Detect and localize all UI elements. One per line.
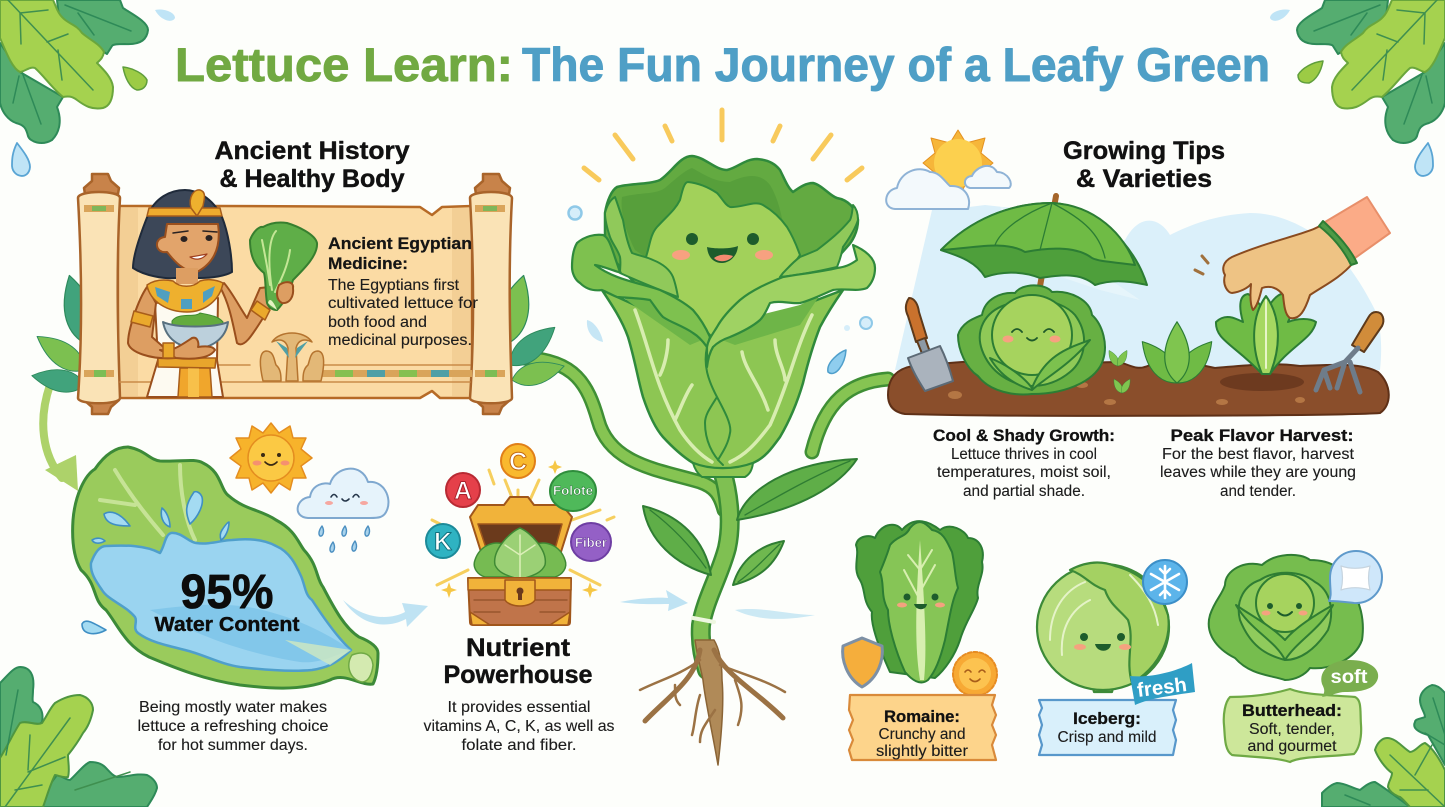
text: cool and shady growth: Lettuce thrives in cool (951, 446, 1097, 463)
corner leaves: bottom left (0, 667, 157, 807)
lettuce leaf (73, 447, 378, 688)
corner leaves: top right (1297, 0, 1445, 143)
raised arm (220, 283, 279, 344)
butterhead card: and gourmet (1248, 738, 1337, 755)
scroll band decoration (84, 205, 505, 382)
seed flecks (1195, 256, 1208, 274)
hair and headdress (133, 190, 232, 278)
lower arm (128, 287, 176, 358)
romaine card (849, 695, 996, 760)
shield icon (843, 638, 882, 687)
arrow: nutrients to plant (620, 590, 815, 619)
nutrient description: It provides essential (448, 699, 590, 716)
soil mound (888, 360, 1389, 416)
lettuce head centre twist (705, 347, 730, 465)
nutrient description: folate and fiber. (462, 737, 576, 754)
water description: lettuce a refreshing choice (138, 718, 329, 735)
butterhead head (1209, 555, 1363, 680)
water droplets (82, 492, 229, 634)
fresh ribbon: fresh (1136, 674, 1188, 702)
egyptian woman holding lettuce (128, 190, 317, 397)
text: cool and shady growth (933, 427, 1115, 500)
stem leaves (643, 459, 857, 585)
nutrient description (424, 699, 614, 754)
water description: for hot summer days. (158, 737, 308, 754)
picked lettuce (1216, 294, 1316, 374)
vitamin badges: C (509, 448, 527, 476)
text: cool and shady growth: temperatures, moist soil, (937, 464, 1111, 481)
stem (701, 470, 730, 670)
section heading: growing tips: Growing Tips (1063, 137, 1225, 165)
arrow: scroll to water leaf (43, 385, 78, 491)
variety: butterhead (1209, 551, 1382, 762)
nutrient heading: Powerhouse (444, 661, 593, 689)
text: peak flavor harvest: For the best flavor, harvest (1162, 446, 1355, 463)
panel: egyptian scroll (30, 174, 567, 414)
egyptian medicine text: Ancient Egyptian (328, 235, 472, 253)
text: peak flavor harvest: leaves while they are young (1160, 464, 1356, 481)
nutrient heading (444, 634, 593, 689)
seedlings (1106, 322, 1220, 395)
nutrient heading: Nutrient (466, 634, 571, 662)
treasure chest lid (470, 497, 572, 555)
egyptian medicine text: The Egyptians first (328, 277, 460, 294)
title: The Fun Journey of a Leafy Green (522, 38, 1270, 91)
vitamin badges: K (434, 528, 452, 556)
egyptian medicine text: Medicine: (328, 255, 408, 273)
pillow bubble (1329, 551, 1382, 603)
text: cool and shady growth: and partial shade. (963, 483, 1085, 500)
egyptian medicine text: medicinal purposes. (328, 332, 472, 349)
iceberg card: Crisp and mild (1058, 729, 1156, 746)
panel: nutrient powerhouse (424, 444, 614, 754)
hand fork (1316, 312, 1383, 392)
soft bubble: soft (1330, 667, 1368, 688)
decorative water drops and small leaves (12, 9, 1433, 176)
central lettuce plant (568, 110, 875, 765)
corner leaves: top left (0, 0, 148, 143)
panel: water content (73, 423, 388, 754)
sky backdrop (895, 205, 1381, 370)
held lettuce (250, 222, 317, 310)
sun and clouds (886, 130, 1011, 209)
water description: Being mostly water makes (139, 699, 327, 716)
garden trowel (906, 298, 953, 391)
panel: garden scene (886, 130, 1390, 416)
bowl of greens (172, 313, 223, 327)
parchment (118, 206, 472, 398)
iceberg head (1037, 563, 1169, 692)
vitamin badges: Folote (553, 484, 593, 498)
connector vines (525, 358, 888, 510)
dress (147, 298, 223, 397)
water description (138, 699, 329, 754)
section heading: ancient history: & Healthy Body (220, 165, 405, 193)
romaine card: Crunchy and (878, 726, 966, 743)
sparkles (441, 460, 598, 598)
section heading: ancient history: Ancient History (214, 137, 410, 165)
leaf umbrella (941, 196, 1147, 292)
scroll side leaves (30, 272, 567, 396)
iceberg card: Iceberg: (1073, 710, 1141, 728)
butterhead card: Butterhead: (1242, 702, 1342, 720)
vitamin badges: A (454, 477, 472, 505)
scroll rollers (78, 174, 512, 414)
rain cloud icon (298, 469, 388, 552)
water content label: Water Content (154, 614, 300, 636)
butterhead card: Soft, tender, (1249, 721, 1335, 738)
plant water drops (568, 206, 872, 373)
text: peak flavor harvest: Peak Flavor Harvest: (1170, 427, 1354, 445)
text: cool and shady growth: Cool & Shady Growth: (933, 427, 1115, 445)
water pool (91, 533, 351, 671)
romaine leaves (856, 521, 983, 682)
arrow: water to nutrients (343, 600, 428, 627)
variety: iceberg (1037, 560, 1195, 755)
fresh ribbon (1130, 663, 1195, 705)
lettuce head upright leaves (605, 197, 678, 297)
variety: romaine (843, 521, 997, 760)
title: Lettuce Learn: (175, 38, 513, 91)
smiling sun badge (953, 652, 997, 696)
egyptian medicine text (328, 235, 478, 349)
romaine card: Romaine: (884, 708, 960, 726)
lettuce head cup (602, 290, 843, 468)
section heading: growing tips (1063, 137, 1225, 193)
lettuce head back leaves (605, 156, 858, 300)
vitamin badges: Fiber (575, 536, 607, 550)
collar (147, 280, 223, 312)
snowflake badge (1143, 560, 1187, 604)
corner leaves: bottom right (1322, 685, 1445, 807)
text: peak flavor harvest (1160, 427, 1356, 500)
nutrient description: vitamins A, C, K, as well as (424, 718, 614, 735)
lettuce in chest (474, 528, 566, 578)
treasure chest base (468, 578, 571, 625)
egyptian medicine text: both food and (328, 314, 427, 331)
romaine card: slightly bitter (876, 743, 968, 760)
sun icon (230, 423, 312, 493)
lettuce under umbrella (958, 285, 1105, 394)
sparkle rays (432, 470, 614, 585)
section heading: ancient history (214, 137, 410, 193)
gloved hand (1223, 197, 1390, 318)
iceberg card (1039, 700, 1176, 755)
lotus ornament (260, 333, 324, 381)
section heading: growing tips: & Varieties (1076, 165, 1212, 193)
lettuce head face (646, 182, 800, 337)
text: peak flavor harvest: and tender. (1220, 483, 1296, 500)
egyptian medicine text: cultivated lettuce for (328, 295, 478, 312)
vitamin badges (426, 444, 611, 561)
roots (640, 640, 785, 765)
95% figure: 95% (180, 566, 274, 619)
lettuce head folded petals (572, 235, 710, 347)
soft bubble (1321, 660, 1378, 697)
butterhead card (1224, 689, 1361, 762)
sun rays (584, 110, 862, 180)
